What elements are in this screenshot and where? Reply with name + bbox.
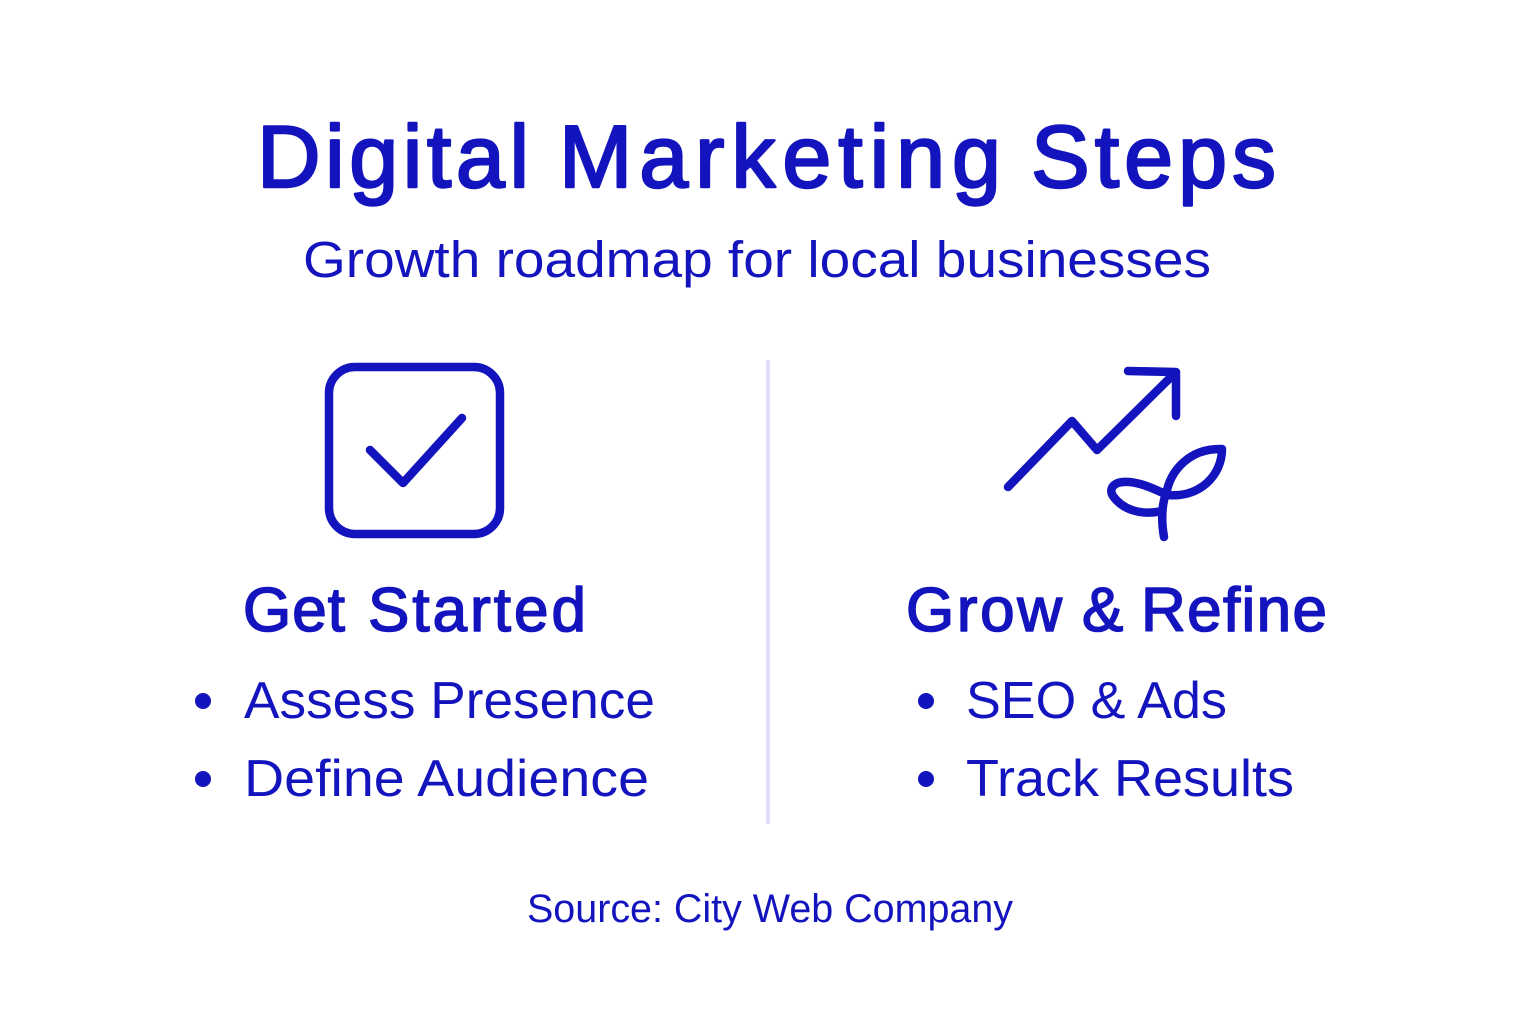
panel: grow and refine [906,371,1327,808]
icon: rising arrow with sprout [1008,371,1222,537]
source note: Source: City Web Company [527,887,1013,931]
heading: grow and refine: Grow [906,576,1062,645]
subtitle: Growth roadmap for local businesses [303,231,1211,288]
bullet list: grow and refine: SEO & Ads [966,672,1227,730]
column divider [766,360,770,824]
bullet list: get started: Define Audience [244,750,649,808]
title: Marketing [559,107,1001,206]
bullet list: get started: Assess Presence [244,672,655,730]
heading: get started: Get [243,576,345,645]
bullet list: get started [195,672,655,808]
bullet list: grow and refine: Track Results [966,750,1294,808]
heading: get started: Started [368,576,586,645]
panel: get started [195,367,655,808]
heading: grow and refine: Refine [1141,576,1327,645]
icon: checkbox with check mark [329,367,500,534]
title: Digital [257,107,529,206]
heading: grow and refine: & [1082,576,1123,645]
title: Steps [1031,107,1276,206]
bullet list: grow and refine [918,672,1294,808]
